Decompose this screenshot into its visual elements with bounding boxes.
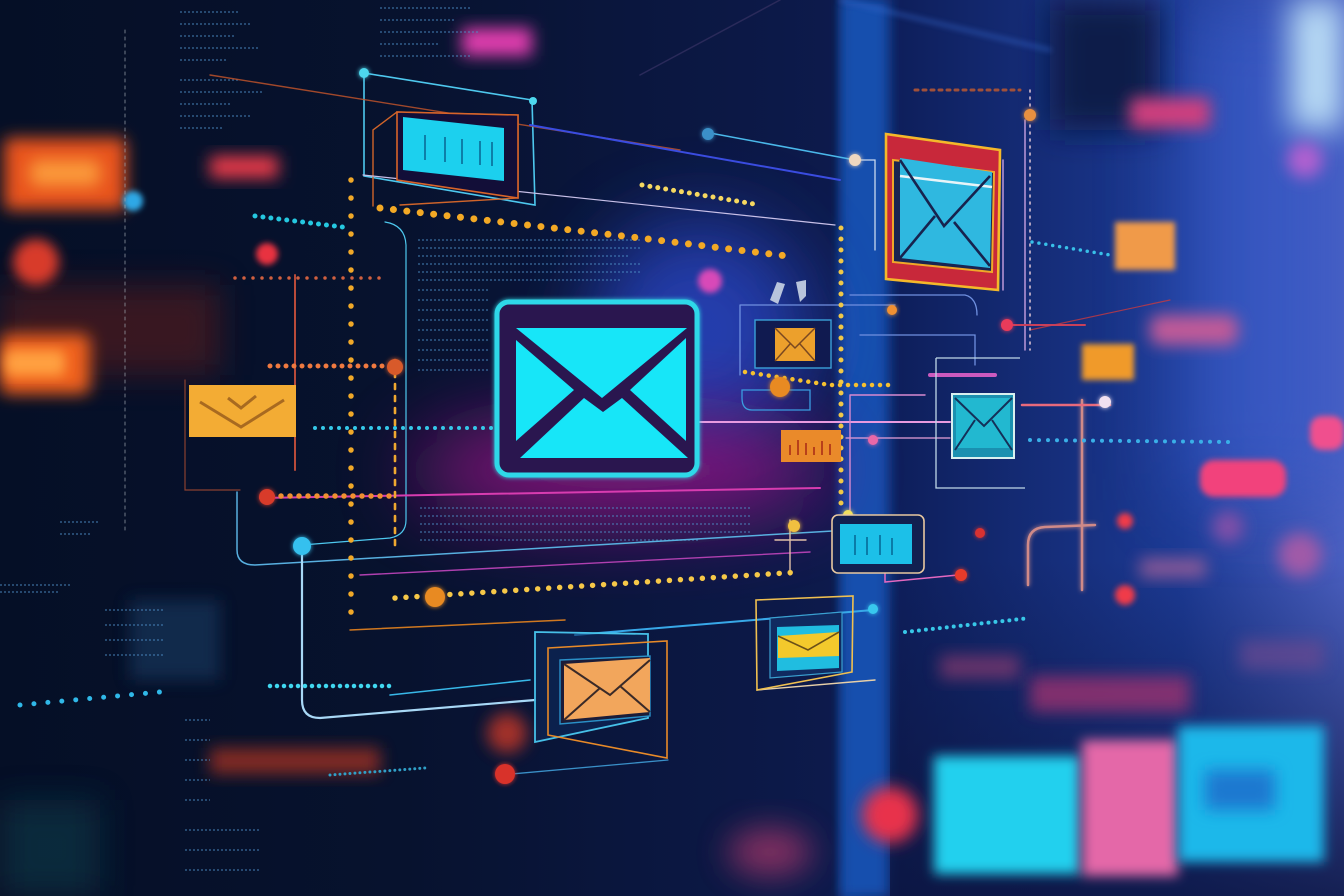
icon: bottom orange envelope [535, 632, 667, 758]
icon: main envelope [497, 302, 697, 475]
icon: left orange envelope [189, 385, 296, 437]
icon: yellow and cyan envelope [756, 596, 853, 690]
top chart panel [397, 112, 518, 198]
icon: right outlined envelope [936, 358, 1025, 488]
icon: small orange envelope centre [755, 320, 831, 368]
data text texture [0, 8, 750, 870]
node dots [256, 68, 1135, 784]
orange chart card [781, 430, 841, 462]
cyan chart card [832, 515, 924, 573]
icon: top right envelope [886, 134, 1000, 290]
connector lines [125, 0, 1170, 775]
small pen and clip icons [770, 280, 806, 304]
dotted data paths [20, 90, 1230, 775]
